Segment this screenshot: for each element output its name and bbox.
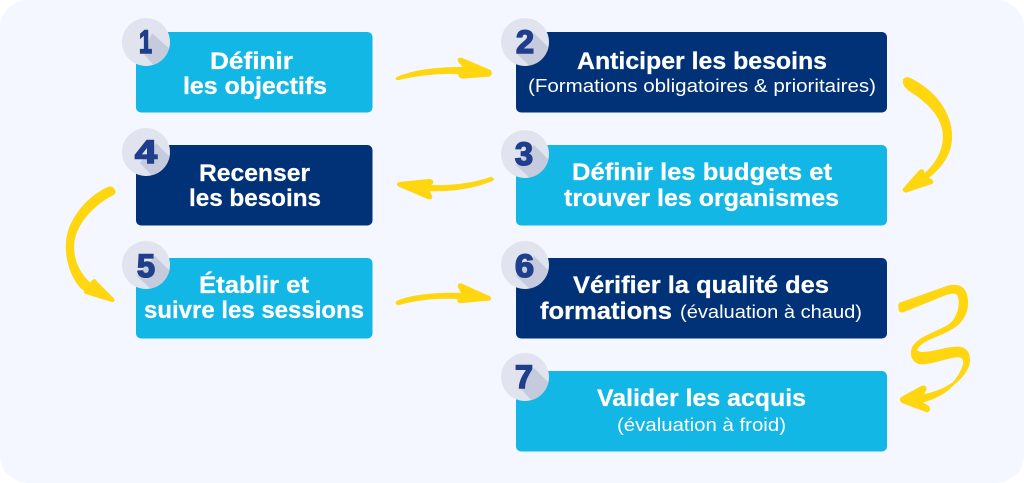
step 7: Valider les acquis: Valider les acquis [597, 385, 806, 412]
step 3: Définir les budgets et trouver les organismes: 3 [515, 136, 533, 172]
step 4: Recenser les besoins [122, 128, 372, 226]
step 6: Vérifier la qualité des formations: Vérifier la qualité des [573, 272, 829, 299]
step 7: Valider les acquis: (évaluation à froid) [617, 415, 786, 435]
step 6: Vérifier la qualité des formations: (évaluation à chaud) [680, 302, 862, 322]
step 5: Établir et suivre les sessions: suivre les sessions [144, 297, 364, 324]
step 5: Établir et suivre les sessions [122, 241, 372, 338]
step 4: Recenser les besoins: Recenser [199, 160, 310, 187]
step 2: Anticiper les besoins: (Formations obligatoires & prioritaires) [528, 76, 876, 96]
step 6: Vérifier la qualité des formations: 6 [515, 248, 534, 284]
arrow: step 5 to step 6 [397, 284, 490, 304]
arrow: step 2 to step 3 [904, 78, 951, 192]
step 3: Définir les budgets et trouver les organismes: Définir les budgets et [572, 159, 832, 186]
step 1: Définir les objectifs: 1 [139, 24, 152, 60]
step 3: Définir les budgets et trouver les organismes [501, 130, 887, 226]
step 7: Valider les acquis: 7 [515, 359, 533, 395]
step 1: Définir les objectifs: Définir [210, 48, 293, 75]
step 2: Anticiper les besoins [501, 18, 887, 112]
step 1: Définir les objectifs [122, 18, 372, 112]
step 6: Vérifier la qualité des formations: formations [540, 298, 672, 325]
step 4: Recenser les besoins: 4 [135, 134, 157, 170]
step 7: Valider les acquis [501, 353, 887, 452]
arrow: squiggle from step 6 to step 7 [900, 286, 969, 411]
step 2: Anticiper les besoins: Anticiper les besoins [577, 48, 827, 75]
step 1: Définir les objectifs: les objectifs [183, 73, 327, 100]
arrow: step 3 to step 4 [398, 178, 493, 198]
step 6: Vérifier la qualité des formations [501, 241, 887, 338]
step 2: Anticiper les besoins: 2 [516, 24, 534, 60]
arrow: step 4 to step 5 [67, 188, 114, 301]
arrow: step 1 to step 2 [397, 59, 491, 79]
step 3: Définir les budgets et trouver les organismes: trouver les organismes [564, 185, 839, 212]
step 5: Établir et suivre les sessions: 5 [137, 248, 155, 284]
step 5: Établir et suivre les sessions: Établir et [199, 271, 309, 299]
step 4: Recenser les besoins: les besoins [189, 185, 321, 212]
